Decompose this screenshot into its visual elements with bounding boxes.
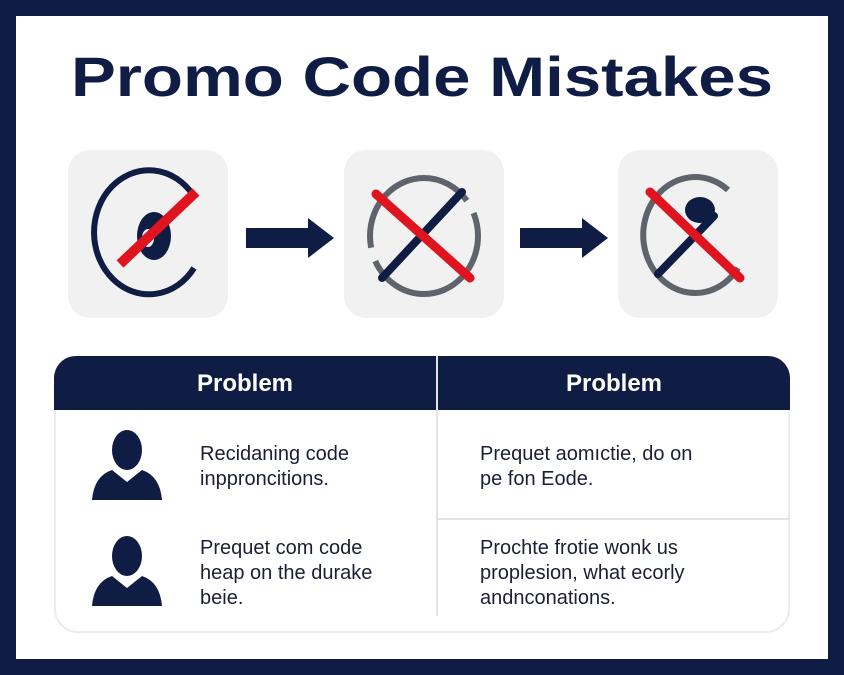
header left: Problem — [197, 370, 293, 397]
text right row 1: pe fon Eode. — [480, 468, 593, 490]
text right row 2 — [480, 537, 685, 609]
text right row 1: Prequet aomıctie, do on — [480, 443, 692, 465]
text right row 2: Prochte frotie wonk us — [480, 537, 678, 559]
table header — [54, 356, 790, 410]
text right row 1 — [480, 443, 692, 490]
arrow 1 — [246, 218, 334, 258]
header right: Problem — [566, 370, 662, 397]
text left row 2: beie. — [200, 587, 243, 609]
text left row 1: Recidaning code — [200, 443, 349, 465]
text left row 1: inpproncitions. — [200, 468, 329, 490]
text right row 2: andnconations. — [480, 587, 616, 609]
icon box 1 — [68, 150, 228, 318]
title: Promo Code Mistakes — [71, 45, 773, 108]
icon box 2 — [344, 150, 504, 318]
arrow 2 — [520, 218, 608, 258]
icon box 3 — [618, 150, 778, 318]
table — [54, 356, 790, 633]
text left row 2: Prequet com code — [200, 537, 362, 559]
text right row 2: proplesion, what ecorly — [480, 562, 685, 584]
text left row 2 — [200, 537, 372, 609]
person icon 1 — [92, 430, 162, 500]
text left row 1 — [200, 443, 349, 490]
person icon 2 — [92, 536, 162, 606]
text left row 2: heap on the durake — [200, 562, 372, 584]
